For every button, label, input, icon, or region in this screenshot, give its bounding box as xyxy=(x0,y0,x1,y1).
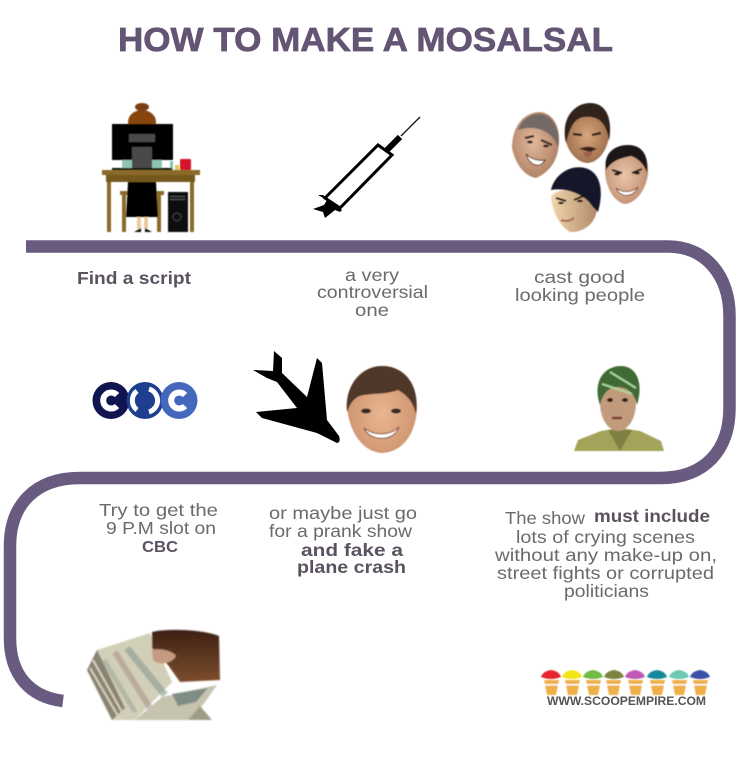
icon: scoopempire logo xyxy=(541,670,711,708)
step text: must include: without any make-up on, xyxy=(494,545,717,565)
step text: CBC slot: 9 P.M slot on xyxy=(106,518,216,538)
step text: cast xyxy=(515,267,645,305)
title: HOW TO MAKE A MOSALSAL xyxy=(118,22,613,59)
face 2 xyxy=(565,103,610,163)
step text: prank show: for a prank show xyxy=(269,521,412,541)
icon: woman at desk xyxy=(102,103,200,232)
step text: CBC slot xyxy=(99,500,218,556)
step text: prank show xyxy=(269,503,417,577)
step text: controversial: a very xyxy=(345,265,399,285)
icon: prank show host face xyxy=(347,366,417,453)
icon: scared actor with headscarf xyxy=(574,366,664,451)
step text: must include: politicians xyxy=(564,581,649,601)
step text: must include: The show xyxy=(505,508,585,528)
step text: CBC slot: Try to get the xyxy=(99,500,218,520)
step text: CBC slot: CBC xyxy=(142,539,178,556)
face 4 xyxy=(551,167,601,232)
face 3 xyxy=(605,145,648,204)
step text: must include xyxy=(494,506,717,601)
step text: must include: street fights or corrupted xyxy=(497,563,714,583)
website text: WWW.SCOOPEMPIRE.COM xyxy=(547,696,706,708)
icon: syringe xyxy=(313,117,420,218)
step text: controversial: one xyxy=(355,300,389,320)
step text: controversial xyxy=(317,265,428,320)
step text: prank show: plane crash xyxy=(297,557,406,577)
step text: find a script: Find a script xyxy=(77,268,191,288)
timeline track xyxy=(10,246,730,701)
face 1 xyxy=(512,112,559,178)
step text: prank show: or maybe just go xyxy=(269,503,417,523)
icon: money in hand xyxy=(87,630,220,720)
ice cream cones xyxy=(541,670,711,695)
step text: cast: looking people xyxy=(515,285,645,305)
icon: plane xyxy=(253,351,340,443)
step text: cast: cast good xyxy=(534,267,625,287)
icon: cast faces xyxy=(512,103,648,232)
step text: controversial: controversial xyxy=(317,282,428,302)
step text: must include: must include xyxy=(594,506,710,526)
step text: prank show: and fake a xyxy=(301,540,403,560)
step text: must include: lots of crying scenes xyxy=(516,527,695,547)
icon: CBC logo xyxy=(92,382,198,419)
